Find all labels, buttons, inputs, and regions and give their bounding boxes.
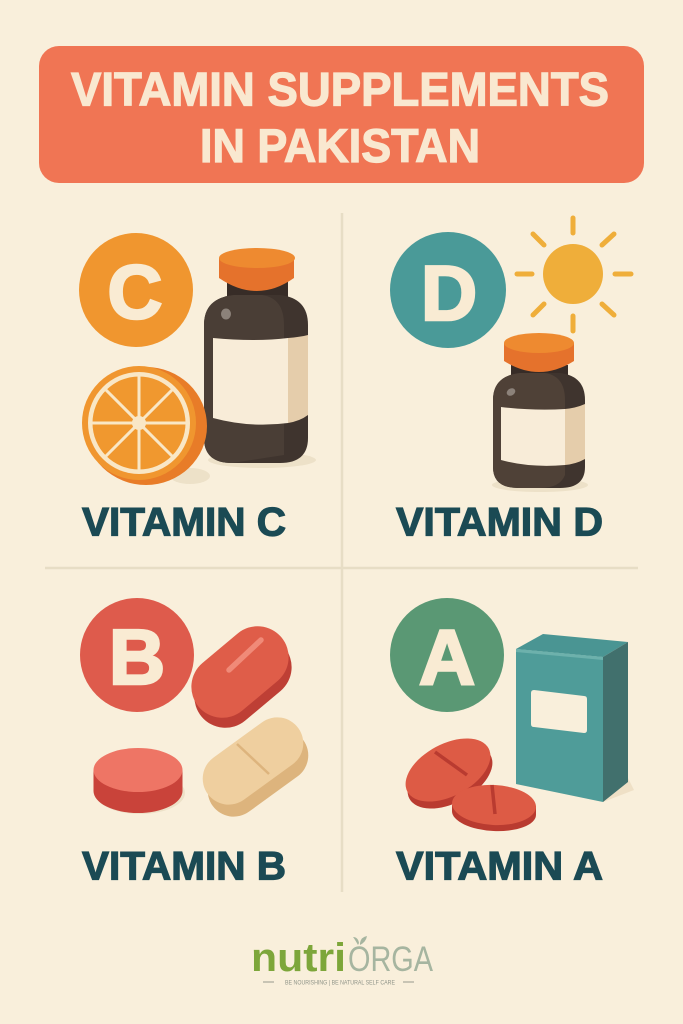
icon: letter C badge: C [108, 250, 162, 336]
icon: sun [517, 218, 631, 331]
icon: letter A badge: A [419, 613, 475, 701]
icon: orange slice [82, 366, 210, 485]
label: vitamin D: VITAMIN D [396, 500, 603, 544]
icon: red capsule pill [179, 614, 304, 740]
icon: letter B badge [80, 598, 194, 712]
logo: nutriORGA [251, 936, 434, 986]
icon: supplement bottle [204, 248, 316, 468]
icon: red tablets [395, 725, 537, 831]
icon: round tablet [94, 748, 185, 814]
logo: nutriORGA: nutri [251, 936, 346, 980]
panel: vitamin B [80, 598, 319, 888]
icon: letter D badge [390, 232, 506, 348]
label: vitamin A: VITAMIN A [396, 844, 603, 888]
panel: vitamin D [390, 218, 631, 544]
label: vitamin B: VITAMIN B [82, 844, 286, 888]
label: vitamin C: VITAMIN C [82, 500, 286, 544]
logo: nutriORGA: ORGA [348, 940, 434, 979]
icon: tan caplet [192, 707, 319, 827]
icon: supplement bottle [492, 333, 588, 492]
icon: letter B badge: B [109, 613, 165, 701]
icon: letter C badge [79, 233, 193, 347]
icon: leaf sprout [353, 936, 367, 945]
title banner: VITAMIN SUPPLEMENTS [71, 62, 609, 116]
icon: letter A badge [390, 598, 504, 712]
panel: vitamin C [79, 233, 316, 544]
title banner [39, 46, 644, 183]
title banner: IN PAKISTAN [200, 119, 480, 172]
tagline: BE NOURISHING | BE NATURAL SELF CARE [285, 980, 395, 986]
icon: supplement box [516, 634, 634, 802]
panel: vitamin A [390, 598, 634, 888]
icon: letter D badge: D [421, 249, 477, 337]
